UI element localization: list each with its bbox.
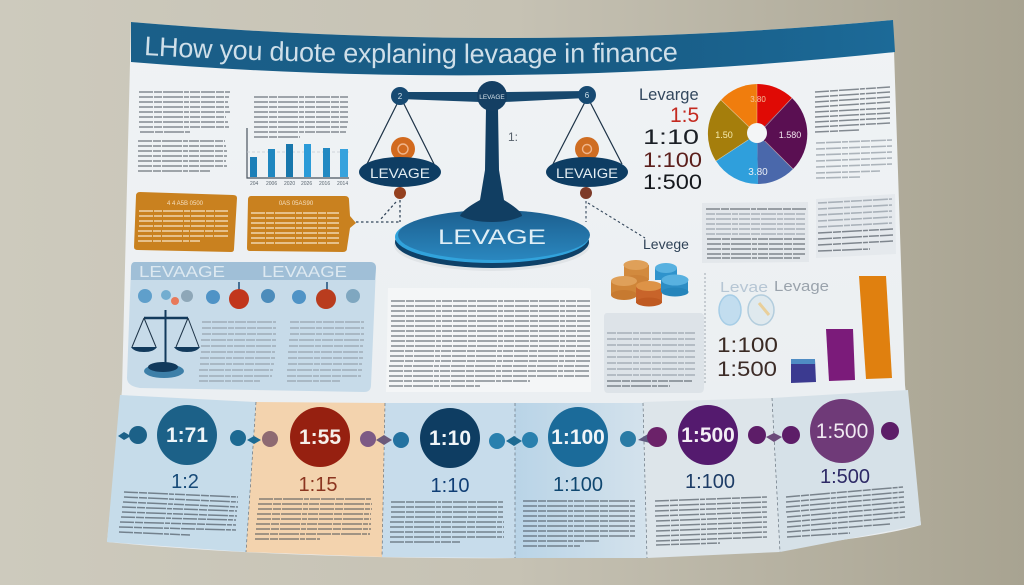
panel: step 1: 1:2 (171, 471, 199, 493)
text block: above bar chart (254, 97, 348, 137)
panel: leverage chart card: Levae (720, 279, 768, 296)
title band (131, 20, 895, 76)
beam (400, 91, 586, 102)
bar chart: 2014 (337, 181, 348, 187)
text card: middle right 1 (702, 202, 809, 263)
panel: leverage chart card: Levage (774, 278, 829, 295)
panel: step 3: 1:10 (431, 475, 469, 497)
panel dividers (246, 398, 780, 558)
bar chart: 2026 (301, 181, 312, 187)
pie chart: 3.80 (750, 95, 766, 104)
panel: step 5 (643, 398, 780, 558)
title: LHow you duote explaning levaage in finance (146, 36, 677, 69)
right pan (546, 137, 628, 199)
pie chart: 1.50 (715, 130, 733, 140)
beam hubs (391, 81, 596, 111)
timeline strip (107, 390, 921, 558)
panel: step 4: 1:100 (553, 474, 603, 496)
panel: step 6: 1:500 (816, 420, 868, 443)
panel: step 3 (382, 403, 515, 558)
panel: step 1: 1:71 (166, 424, 208, 447)
beam hubs: LEVAGE (479, 94, 505, 101)
bars (791, 276, 892, 383)
panel: step 1 (107, 395, 256, 552)
panel: step 3: 1:10 (429, 427, 471, 450)
orange callout 1: 4 4 A5B 0500 (167, 201, 204, 207)
panel: step 4: 1:100 (551, 426, 605, 449)
panel: step 2: 1:55 (299, 426, 341, 449)
dotted connector: right (586, 201, 645, 238)
text card: gray note (604, 313, 704, 393)
platform (394, 210, 590, 271)
panel: leverage chart card: 1:100 (717, 334, 778, 357)
coins (611, 260, 688, 306)
text block: top left (138, 92, 230, 171)
icon: small scale (131, 310, 200, 378)
orange callout 2: 0AS 05AS90 (279, 201, 314, 207)
icons: dots row (138, 289, 360, 309)
ratio list: Levarge (639, 86, 699, 104)
strings (367, 102, 622, 164)
beam hubs: 6 (585, 91, 590, 100)
panel: step 5: 1:100 (685, 471, 735, 493)
bar chart (247, 128, 349, 187)
panel: leverage comparison (127, 262, 376, 392)
ratio list (639, 86, 702, 194)
text block: top right (815, 87, 892, 178)
left pan: LEVAGE (370, 165, 430, 181)
panel: leverage chart card: 1:500 (717, 358, 777, 381)
pie chart (708, 84, 807, 184)
bar chart: 2006 (266, 181, 277, 187)
right pan: LEVAIGE (556, 166, 618, 181)
panel: step 2: 1:15 (299, 474, 337, 496)
icons: blue blobs (719, 295, 774, 325)
bar chart: 2020 (284, 181, 295, 187)
label: Levege: Levege (643, 236, 689, 252)
beam hubs: 2 (398, 92, 403, 101)
pie chart: 1.580 (779, 130, 801, 140)
panel: step 4 (515, 403, 647, 558)
paper sheet (107, 20, 921, 558)
text card: centre article (386, 288, 591, 392)
panel: step 2 (246, 402, 385, 557)
balance scale (359, 81, 628, 271)
text lines (199, 322, 364, 381)
bar chart: 204 (250, 181, 259, 187)
panel: step 6: 1:500 (820, 466, 870, 488)
text card: middle right 2 (816, 194, 896, 258)
orange callout 2 (247, 196, 356, 252)
dotted connector: left (356, 200, 400, 222)
bar chart: 2016 (319, 181, 330, 187)
panel: step 5: 1:500 (681, 424, 735, 447)
panel: leverage chart card (705, 273, 892, 385)
pie chart: 3.80 (748, 167, 768, 178)
left pan (359, 137, 441, 199)
panel: leverage comparison: LEVAAGE (262, 264, 347, 281)
panel: step 6 (772, 390, 921, 552)
ratio list: 1:100 (643, 149, 702, 172)
panel: leverage comparison: LEVAAGE (139, 264, 225, 281)
label: ratio mark: 1: (508, 130, 518, 144)
platform: LEVAGE (438, 226, 546, 249)
post (460, 108, 522, 222)
connector nodes (118, 422, 899, 449)
ratio list: 1:500 (643, 171, 702, 194)
orange callout 1 (134, 192, 237, 252)
ratio list: 1:10 (643, 126, 699, 149)
ratio list: 1:5 (670, 104, 699, 127)
